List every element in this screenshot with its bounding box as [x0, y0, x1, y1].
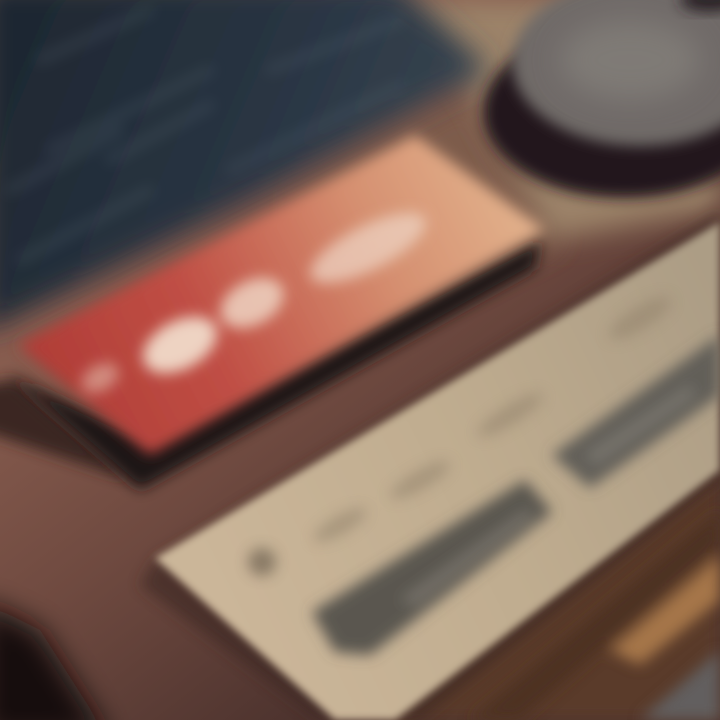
wood stripes bottom-right [470, 510, 720, 720]
navy chalkboard paper [0, 0, 490, 335]
cream paper ticket [140, 212, 720, 720]
dark pill: lower [312, 480, 552, 655]
card shadow [8, 240, 540, 490]
round object: grey top [512, 0, 720, 146]
round object: dark base [483, 26, 720, 198]
left dark shadow [0, 380, 130, 480]
dark pill: upper [552, 335, 720, 488]
ticket text blobs [76, 199, 435, 399]
tan surface at top [390, 0, 720, 240]
red ticket card [18, 135, 545, 455]
print marks [248, 290, 676, 576]
bottom-left dark corner [0, 600, 110, 720]
